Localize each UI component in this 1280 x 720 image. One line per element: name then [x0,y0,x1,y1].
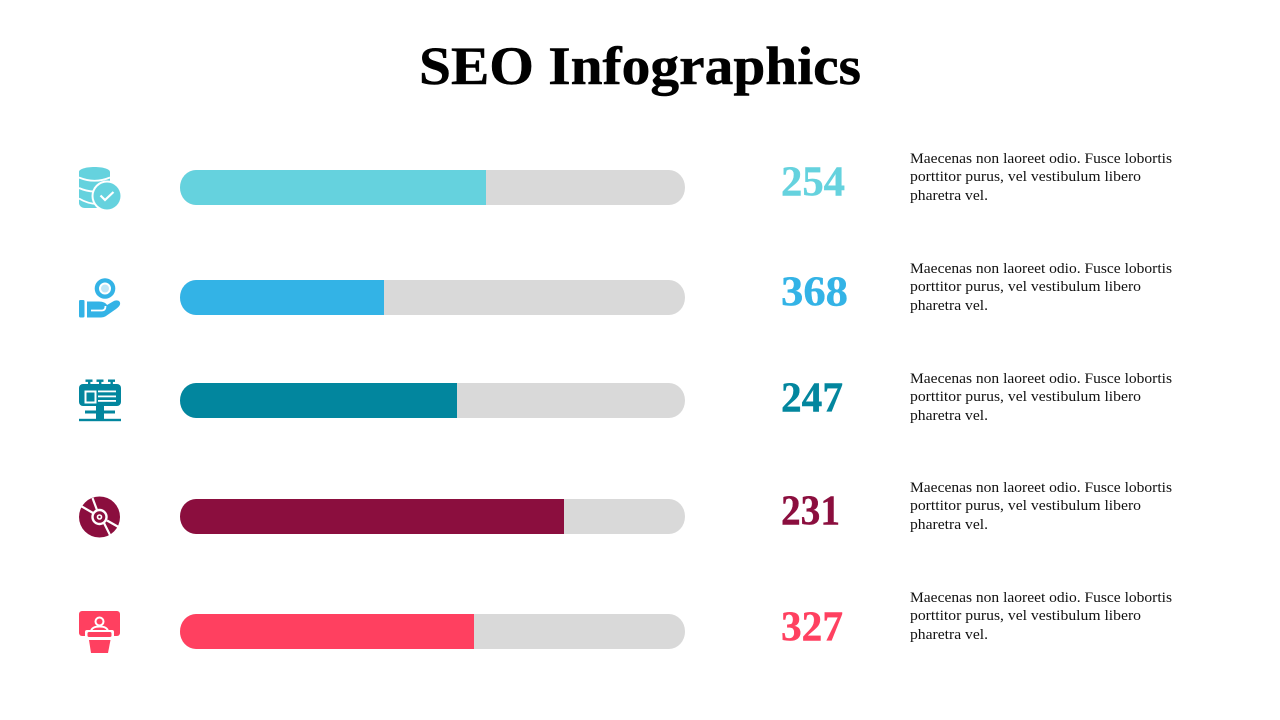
progress bar: 327 [180,614,685,649]
description text [910,371,1172,424]
icon: database check [79,167,122,212]
value: 247: 247 [781,376,843,422]
icon: speaker at podium [79,611,120,653]
progress bar: 247 [180,383,685,418]
description text: porttitor purus, vel vestibulum libero [910,279,1141,295]
icon: hand with target [79,278,120,318]
progress bar: 368 [180,280,685,315]
title: SEO Infographics [419,36,861,96]
row 4 [79,480,1172,538]
description text: pharetra vel. [910,408,988,424]
description text [910,151,1172,204]
progress bar: 254 [180,170,685,205]
description text: porttitor purus, vel vestibulum libero [910,608,1141,624]
row 1 [79,151,1172,212]
description text: pharetra vel. [910,517,988,533]
description text: pharetra vel. [910,188,988,204]
description text: Maecenas non laoreet odio. Fusce lobortis [910,151,1172,167]
description text: Maecenas non laoreet odio. Fusce lobortis [910,480,1172,496]
row 2 [79,261,1172,318]
value: 254: 254 [781,160,845,206]
value: 327: 327 [781,604,843,650]
description text: porttitor purus, vel vestibulum libero [910,169,1141,185]
icon: billboard [79,380,121,421]
icon: disc [79,496,120,538]
description text [910,261,1172,314]
value: 231: 231 [781,488,840,534]
description text [910,480,1172,533]
description text: porttitor purus, vel vestibulum libero [910,498,1141,514]
value: 368: 368 [781,270,848,316]
progress bar: 231 [180,499,685,534]
row 3 [79,371,1172,424]
description text: Maecenas non laoreet odio. Fusce lobortis [910,371,1172,387]
description text: Maecenas non laoreet odio. Fusce lobortis [910,261,1172,277]
description text [910,590,1172,643]
description text: porttitor purus, vel vestibulum libero [910,389,1141,405]
description text: pharetra vel. [910,627,988,643]
row 5 [79,590,1172,653]
description text: pharetra vel. [910,298,988,314]
description text: Maecenas non laoreet odio. Fusce lobortis [910,590,1172,606]
